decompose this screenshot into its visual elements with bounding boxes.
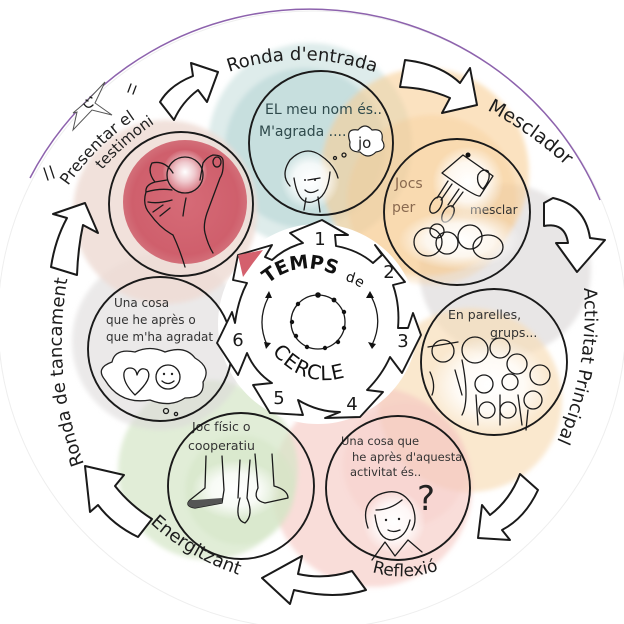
icon: child with thought bubble: jo xyxy=(357,134,371,152)
arrow: testimoni to entrada xyxy=(160,63,218,120)
step numbers: 1 xyxy=(314,229,326,250)
icon: thought cloud with heart and smile xyxy=(101,348,206,416)
curved arrows around centre xyxy=(262,291,378,349)
step label: Reflexió: Reflexió xyxy=(374,558,437,576)
step numbers: 5 xyxy=(273,388,285,409)
text: una cosa que he après: Una cosa que xyxy=(341,434,419,448)
centre title: Temps de Cercle: TEMPS xyxy=(260,254,338,281)
step label: Energitzant: Energitzant xyxy=(151,514,242,575)
icon: feet jumping xyxy=(188,454,288,523)
icon: star xyxy=(73,82,112,130)
text: una cosa que he après: que m'ha agradat xyxy=(106,330,213,344)
watercolour washes xyxy=(72,43,591,587)
text: una cosa que he après: activitat és.. xyxy=(350,465,421,479)
step label: Mesclador: Mesclador xyxy=(488,98,573,163)
centre title: Temps de Cercle: CERCLE xyxy=(275,346,344,380)
arrow: energitzant to tancament xyxy=(85,466,152,537)
text: en parelles: grups... xyxy=(490,325,537,340)
text: joc físic o cooperatiu: cooperatiu xyxy=(188,438,255,453)
arrow: entrada to mesclador xyxy=(400,60,477,113)
step label: Ronda de tancament: Ronda de tancament xyxy=(50,278,84,467)
arrow: mesclador to activitat xyxy=(544,198,605,272)
step label: Activitat Principal: Activitat Principal xyxy=(558,288,598,446)
step numbers: 6 xyxy=(232,330,244,351)
step numbers: 2 xyxy=(383,262,395,283)
icon: oranges and lemons xyxy=(398,210,522,270)
icon: hand holding stone xyxy=(145,150,223,267)
text: en parelles: En parelles, xyxy=(448,307,521,322)
text: el meu nom: M'agrada .... xyxy=(259,124,346,140)
centre title: Temps de Cercle: de xyxy=(346,272,364,287)
panel: ronda d'entrada xyxy=(249,71,393,215)
red arrowhead xyxy=(238,250,263,277)
arrow: activitat to reflexió xyxy=(478,474,538,540)
text: jocs per: mesclar xyxy=(470,203,518,217)
text: una cosa que he après: he après d'aquesta xyxy=(352,450,462,464)
panel: energitzant xyxy=(168,413,314,559)
step label: Presentar el testimoni: Presentar el xyxy=(60,110,134,185)
icon: group of people xyxy=(428,337,550,430)
step numbers: 3 xyxy=(397,331,409,352)
text: jocs per: Jocs xyxy=(394,176,423,192)
arrow: tancament to testimoni xyxy=(51,203,98,275)
text: una cosa que he après: que he après o xyxy=(106,313,196,327)
step label: Ronda d'entrada: Ronda d'entrada xyxy=(226,46,376,72)
central gear of six arrows xyxy=(216,219,422,419)
text: jocs per: per xyxy=(392,200,416,216)
panel: presentar el testimoni xyxy=(109,132,253,276)
small circle of dots xyxy=(290,292,346,350)
text: joc físic o cooperatiu: Joc físic o xyxy=(191,419,251,434)
panel: activitat principal xyxy=(421,289,567,435)
arrow: reflexió to energitzant xyxy=(262,556,366,604)
icon: boy with question mark xyxy=(362,479,435,560)
step numbers: 4 xyxy=(346,394,358,415)
text: el meu nom: EL meu nom és.. xyxy=(265,102,382,118)
step label: Presentar el testimoni: testimoni xyxy=(95,114,154,168)
centre white disc xyxy=(218,224,418,424)
panel: ronda de tancament xyxy=(88,277,232,421)
step label: Presentar el testimoni xyxy=(43,83,154,185)
centre title: Temps de Cercle xyxy=(260,254,364,380)
panel: reflexió xyxy=(326,416,470,560)
panel: mesclador xyxy=(384,139,530,285)
icon: hand mixer xyxy=(427,146,504,224)
text: una cosa que he après: Una cosa xyxy=(114,296,169,310)
step numbers xyxy=(232,229,409,415)
icon: boy with question mark: ? xyxy=(417,479,435,519)
icon: child with thought bubble xyxy=(280,126,384,212)
